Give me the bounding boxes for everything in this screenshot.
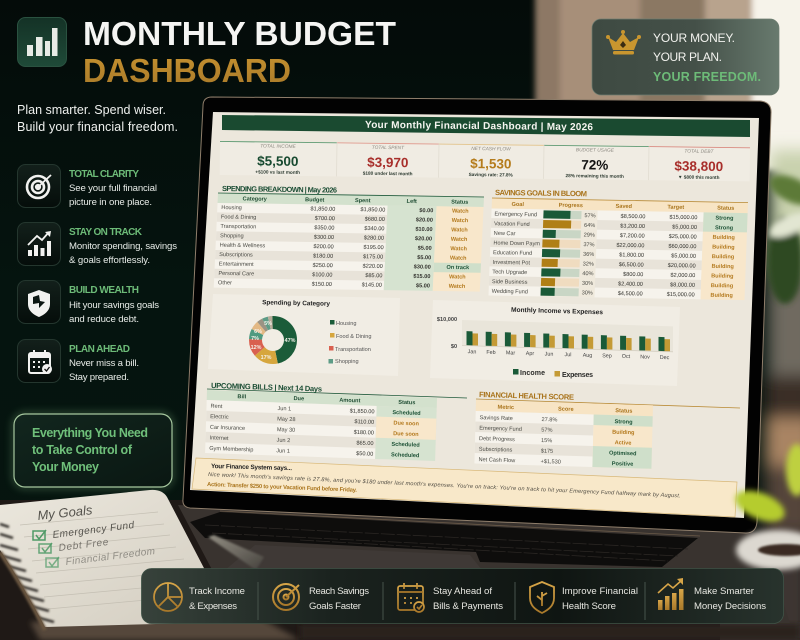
table: spending breakdown: $1,850.00 <box>360 207 385 214</box>
bar chart: Jan <box>468 349 476 355</box>
icon: growth chart <box>28 231 51 256</box>
bar chart: Nov <box>640 354 650 361</box>
panel: monthly income vs expenses: $10,000 <box>437 317 457 323</box>
table: financial health score: Score <box>558 406 574 413</box>
icon: pie chart <box>154 583 182 611</box>
table: spending breakdown: Watch <box>451 237 468 243</box>
KPI: total debt: ▼ $800 this month <box>678 174 720 180</box>
KPI: total spent: TOTAL SPENT <box>372 145 405 151</box>
table: upcoming bills: $110.00 <box>354 419 374 426</box>
callout: finance system message <box>192 458 737 517</box>
benefit: stay ahead <box>398 583 503 612</box>
benefit: stay ahead: Stay Ahead of <box>433 586 492 597</box>
financial health heading <box>476 390 740 408</box>
table: savings goals: 64% <box>584 223 595 229</box>
table: spending breakdown: Transportation <box>220 224 256 230</box>
callout: finance system message: Nice work! This month's savings rate is 27.8%, and you're $180 under last month's expenses. You're on track: You're on track to hit your Emergency Fund halfway mark by August. <box>208 472 681 499</box>
table: upcoming bills: Jun 1 <box>276 448 290 455</box>
table: spending breakdown: $10.00 <box>415 227 433 233</box>
table: savings goals: 30% <box>582 290 593 297</box>
table: savings goals: $3,200.00 <box>620 224 645 230</box>
table: financial health score: Debt Progress <box>479 436 515 443</box>
table: spending breakdown: $280.00 <box>364 235 384 242</box>
table: spending breakdown: $20.00 <box>416 217 433 224</box>
table: savings goals: $2,000.00 <box>670 273 695 279</box>
table: spending breakdown: Subscriptions <box>219 252 253 259</box>
table: savings goals: Wedding Fund <box>492 289 528 295</box>
icon: growth chart <box>658 589 684 610</box>
table: savings goals: Tech Upgrade <box>492 269 527 276</box>
KPI: net cash flow: Savings rate: 27.8% <box>469 172 514 178</box>
handwriting: my goals: Debt Free <box>58 537 109 554</box>
bar chart: Mar <box>506 350 515 357</box>
KPI: net cash flow: $1,530 <box>470 156 512 171</box>
table: spending breakdown: Watch <box>449 274 466 281</box>
table: spending breakdown: $200.00 <box>313 244 334 250</box>
handwriting: my goals: Emergency Fund <box>52 520 135 541</box>
table: savings goals: Saved <box>615 204 633 210</box>
feature: plan ahead <box>18 340 139 383</box>
table: spending breakdown: $300.00 <box>314 235 334 241</box>
table: financial health score: Metric <box>498 405 514 411</box>
callout: everything you need: to Take Control of <box>32 443 133 457</box>
title: MONTHLY BUDGET <box>83 16 397 53</box>
KPI: budget usage: 28% remaining this month <box>565 173 624 179</box>
table: spending breakdown: $1,850.00 <box>310 206 335 213</box>
callout: your money your plan <box>592 19 779 95</box>
icon: shield <box>28 290 50 317</box>
table: savings goals: 57% <box>584 213 596 219</box>
table: spending breakdown: $680.00 <box>365 217 385 223</box>
benefit: reach savings: Reach Savings <box>309 586 369 597</box>
table: upcoming bills: Scheduled <box>392 410 421 417</box>
callout: everything you need: Your Money <box>32 460 99 474</box>
callout: everything you need <box>14 414 172 487</box>
table: financial health score: Subscriptions <box>479 447 513 454</box>
table: upcoming bills: May 30 <box>277 427 295 434</box>
benefit: improve health: Health Score <box>562 601 616 612</box>
pen <box>208 535 264 570</box>
callout: finance system message: Your Finance System says... <box>211 463 292 472</box>
table: spending breakdown: $180.00 <box>313 253 333 260</box>
table: spending breakdown: Status <box>451 200 468 206</box>
feature: stay on track: STAY ON TRACK <box>69 227 143 238</box>
ruled lines <box>20 512 200 609</box>
feature: stay on track: & goals effortlessly. <box>69 255 150 266</box>
chart legend <box>328 320 371 365</box>
table: savings goals: $7,200.00 <box>620 233 645 240</box>
panel: monthly income vs expenses <box>430 300 680 386</box>
table: upcoming bills: Rent <box>210 404 223 410</box>
table: spending breakdown: Watch <box>449 284 466 290</box>
table: savings goals: $1,800.00 <box>619 252 644 259</box>
progress bars <box>541 210 582 296</box>
table: spending breakdown: Watch <box>450 246 468 252</box>
bar chart: Aug <box>583 353 592 359</box>
table: spending breakdown: Spent <box>355 198 371 204</box>
table: savings goals: 32% <box>583 261 594 268</box>
handwriting: my goals: Financial Freedom <box>65 546 156 568</box>
table: savings goals: Building <box>711 273 734 280</box>
table: financial health score: Building <box>612 430 635 436</box>
donut labels: 12% <box>251 345 262 351</box>
checkboxes <box>33 530 59 567</box>
table: savings goals <box>488 198 748 300</box>
table: savings goals: $4,500.00 <box>618 291 643 297</box>
icon: shield with plant <box>530 582 554 613</box>
benefits bar <box>142 568 784 624</box>
table: spending breakdown: $700.00 <box>315 216 335 222</box>
dashboard title bar <box>222 115 750 137</box>
notebook <box>0 490 232 630</box>
bar chart: Apr <box>526 351 534 357</box>
table: savings goals: Goal <box>511 202 525 208</box>
feature: total clarity: picture in one place. <box>69 197 152 208</box>
table: financial health score: Emergency Fund <box>479 426 522 433</box>
table: savings goals: $5,000.00 <box>672 224 697 231</box>
feature: total clarity <box>18 164 157 208</box>
dashboard title bar: Your Monthly Financial Dashboard | May 2026 <box>365 120 594 133</box>
callout: your money your plan: YOUR MONEY. <box>653 31 735 45</box>
table: upcoming bills: Due soon <box>393 431 419 438</box>
financial health heading: FINANCIAL HEALTH SCORE <box>479 390 574 402</box>
table: savings goals: Investment Pot <box>493 260 531 267</box>
table: upcoming bills: Scheduled <box>391 452 420 459</box>
donut labels: 7% <box>251 336 259 342</box>
benefit: reach savings <box>273 584 369 612</box>
table: spending breakdown: $350.00 <box>314 225 335 232</box>
table: savings goals: $8,000.00 <box>670 282 695 289</box>
table: financial health score: +$1,530 <box>540 459 561 466</box>
savings goals heading: SAVINGS GOALS IN BLOOM <box>495 188 587 198</box>
table: savings goals: Education Fund <box>493 250 532 257</box>
KPI: total spent <box>363 145 413 176</box>
donut labels: 6% <box>254 329 262 335</box>
handwriting: my goals <box>37 502 156 568</box>
bar chart <box>462 320 673 361</box>
table: spending breakdown: $100.00 <box>312 272 332 279</box>
table: upcoming bills: May 28 <box>277 416 296 423</box>
table: savings goals: Side Business <box>492 279 528 286</box>
chart legend: Transportation <box>335 347 371 353</box>
bar chart: Jun <box>545 351 553 358</box>
table: upcoming bills: Electric <box>210 414 229 421</box>
table: financial health score <box>474 400 653 469</box>
benefit: smarter decisions <box>658 578 766 612</box>
chart legend <box>513 369 593 379</box>
table: savings goals: Strong <box>715 216 734 222</box>
bar chart: Jul <box>565 352 571 358</box>
icon: target <box>273 584 299 610</box>
table: upcoming bills <box>205 390 437 461</box>
table: spending breakdown: $5.00 <box>416 283 430 289</box>
KPI: total income: TOTAL INCOME <box>260 143 297 150</box>
chart legend: Expenses <box>562 372 593 379</box>
panel: monthly income vs expenses: $0 <box>451 344 457 350</box>
table: savings goals: $800.00 <box>623 272 643 278</box>
icon: calendar <box>398 583 424 612</box>
bar chart: Oct <box>622 354 631 360</box>
table: spending breakdown: $195.00 <box>363 245 384 251</box>
table: savings goals: Home Down Paym <box>493 241 540 247</box>
table: savings goals: $20,000.00 <box>668 263 696 270</box>
table: spending breakdown: Watch <box>451 227 468 234</box>
panel: spending by category <box>208 294 400 376</box>
feature: total clarity: See your full financial <box>69 183 157 194</box>
table: financial health score: 15% <box>541 438 552 444</box>
handwriting: my goals: My Goals <box>37 502 94 523</box>
screen <box>190 112 759 518</box>
table: spending breakdown: $30.00 <box>414 264 431 271</box>
benefit: track income: & Expenses <box>189 601 237 612</box>
callout: finance system message: Action: Transfer $250 to your Vacation Fund before Friday. <box>207 482 357 494</box>
KPI: budget usage <box>565 147 624 179</box>
table: savings goals: Emergency Fund <box>494 212 537 218</box>
table: upcoming bills: Scheduled <box>391 442 420 449</box>
KPI cards <box>220 141 750 181</box>
benefit: stay ahead: Bills & Payments <box>433 601 503 612</box>
table: upcoming bills: Car Insurance <box>210 425 245 432</box>
table: spending breakdown: $85.00 <box>365 273 382 279</box>
table: savings goals: Building <box>712 235 736 241</box>
feature: build wealth: and reduce debt. <box>69 314 139 325</box>
table: upcoming bills: Jun 1 <box>277 406 291 412</box>
feature: stay on track <box>18 222 177 266</box>
table: savings goals: 30% <box>582 281 593 287</box>
KPI: total debt: TOTAL DEBT <box>684 149 715 155</box>
panel: spending by category: Spending by Category <box>262 299 330 308</box>
table: savings goals: 29% <box>584 232 595 239</box>
upcoming bills heading <box>207 381 467 398</box>
KPI: total income <box>255 143 300 175</box>
table: spending breakdown: $5.00 <box>418 246 432 252</box>
callout: everything you need: Everything You Need <box>32 426 148 440</box>
logo icon <box>18 18 66 66</box>
KPI: total spent: $3,970 <box>367 155 409 170</box>
table: financial health score: 27.8% <box>541 417 558 423</box>
KPI: total spent: $180 under last month <box>363 171 413 176</box>
table: savings goals: Status <box>717 206 734 212</box>
KPI: total debt <box>674 148 723 180</box>
table: savings goals: $2,400.00 <box>618 281 643 288</box>
table: spending breakdown: $20.00 <box>415 236 432 242</box>
table: savings goals: $60,000.00 <box>668 244 696 250</box>
table: spending breakdown: Entertainment <box>219 261 254 268</box>
benefit: reach savings: Goals Faster <box>309 601 362 612</box>
table: spending breakdown: Budget <box>305 197 325 204</box>
table: financial health score: 57% <box>541 427 553 434</box>
table: savings goals: Building <box>711 283 734 290</box>
table: savings goals: $5,000.00 <box>671 253 696 260</box>
table: spending breakdown: On track <box>446 265 470 271</box>
benefit: improve health <box>530 582 638 613</box>
table: spending breakdown: Watch <box>452 209 469 215</box>
table: spending breakdown: Personal Care <box>218 271 254 277</box>
tagline <box>17 103 178 134</box>
table: financial health score: Status <box>615 408 632 415</box>
icon: target <box>27 175 51 198</box>
table: upcoming bills: Internet <box>209 435 229 442</box>
table: upcoming bills: Bill <box>237 394 247 400</box>
table: upcoming bills: Status <box>398 400 415 406</box>
callout: your money your plan: YOUR FREEDOM. <box>653 70 761 84</box>
donut labels: 47% <box>285 338 296 344</box>
table: spending breakdown: $0.00 <box>419 208 433 214</box>
table: spending breakdown: $175.00 <box>363 254 383 261</box>
table: savings goals: $15,000.00 <box>667 292 695 298</box>
feature: plan ahead: PLAN AHEAD <box>69 344 130 355</box>
table: spending breakdown: $145.00 <box>362 282 382 289</box>
table: upcoming bills: Due <box>293 396 304 402</box>
callout: your money your plan: YOUR PLAN. <box>653 50 722 64</box>
table: financial health score: Savings Rate <box>479 415 513 422</box>
table: upcoming bills: Amount <box>339 398 361 404</box>
table: savings goals: $22,000.00 <box>616 243 644 249</box>
KPI: net cash flow <box>469 146 514 178</box>
chart legend: Income <box>520 370 545 377</box>
feature: plan ahead: Stay prepared. <box>69 372 129 383</box>
panel: monthly income vs expenses: Monthly Income vs Expenses <box>511 307 603 316</box>
table: financial health score: Optimised <box>609 451 637 457</box>
icon: crown <box>608 33 639 50</box>
table: savings goals: New Car <box>494 231 516 237</box>
benefit: smarter decisions: Make Smarter <box>694 586 755 597</box>
table: financial health score: Net Cash Flow <box>478 457 516 464</box>
table: spending breakdown: Left <box>406 199 417 205</box>
table: savings goals: Building <box>712 254 735 261</box>
table: spending breakdown: Other <box>218 280 232 286</box>
table: upcoming bills: Gym Membership <box>209 446 253 453</box>
donut labels <box>251 321 296 361</box>
plant and coffee cup <box>731 444 800 570</box>
notebook spiral binding <box>0 524 54 622</box>
table: savings goals: Vacation Fund <box>494 221 530 228</box>
table: upcoming bills: $50.00 <box>356 451 373 458</box>
feature: build wealth: Hit your savings goals <box>69 300 159 311</box>
feature: stay on track: Monitor spending, savings <box>69 241 177 252</box>
KPI: total income: +$100 vs last month <box>255 169 300 175</box>
KPI: budget usage: BUDGET USAGE <box>576 147 615 154</box>
table: spending breakdown: Watch <box>451 218 469 224</box>
table: financial health score: Strong <box>614 419 633 426</box>
table: financial health score: Positive <box>612 461 633 468</box>
bar chart: Feb <box>486 350 496 356</box>
icon: calendar <box>29 350 52 374</box>
table: spending breakdown: $15.00 <box>413 274 430 280</box>
title <box>83 16 397 89</box>
table: spending breakdown: $220.00 <box>362 264 383 270</box>
table: upcoming bills: $1,850.00 <box>350 409 375 415</box>
benefit: track income <box>154 583 245 612</box>
table: upcoming bills: $65.00 <box>356 440 374 447</box>
table: spending breakdown: Housing <box>221 205 242 211</box>
table: spending breakdown: Health & Wellness <box>219 243 266 249</box>
table: savings goals: 40% <box>582 271 594 277</box>
table: savings goals: Strong <box>715 225 734 232</box>
bar chart: Sep <box>602 353 612 359</box>
table: spending breakdown: Food & Dining <box>221 214 256 221</box>
table: savings goals: $8,500.00 <box>620 214 646 220</box>
table: savings goals: 36% <box>583 252 594 258</box>
KPI: total debt: $38,800 <box>674 158 723 174</box>
table: financial health score: $175 <box>541 448 553 455</box>
donut labels: 17% <box>261 355 272 361</box>
table: savings goals: Building <box>710 293 733 299</box>
table: savings goals: Building <box>711 264 735 270</box>
donut labels: 5% <box>264 321 272 327</box>
laptop keyboard deck <box>178 505 790 623</box>
chart legend: Housing <box>336 321 357 327</box>
spending breakdown heading: SPENDING BREAKDOWN | May 2026 <box>222 184 337 195</box>
table: upcoming bills: $180.00 <box>354 430 374 436</box>
table: spending breakdown: $5.00 <box>417 255 431 261</box>
KPI: total income: $5,500 <box>257 153 299 169</box>
table: upcoming bills: Jun 2 <box>276 438 290 444</box>
table: financial health score: Active <box>615 440 631 447</box>
tagline: Build your financial freedom. <box>17 120 178 134</box>
table: spending breakdown: $340.00 <box>364 226 385 232</box>
table: savings goals: 37% <box>583 242 595 248</box>
table: savings goals: $6,500.00 <box>619 262 644 269</box>
table: savings goals: Progress <box>559 203 583 209</box>
table: spending breakdown: Shopping <box>220 233 244 240</box>
donut chart <box>256 322 290 358</box>
feature: plan ahead: Never miss a bill. <box>69 358 139 369</box>
table: savings goals: Target <box>667 205 684 211</box>
feature: total clarity: TOTAL CLARITY <box>69 169 139 180</box>
table: savings goals: Building <box>712 244 735 251</box>
upcoming bills heading: UPCOMING BILLS | Next 14 Days <box>211 381 322 393</box>
table: spending breakdown: Category <box>242 196 268 203</box>
benefit: improve health: Improve Financial <box>562 586 638 597</box>
title: DASHBOARD <box>83 52 291 89</box>
table: spending breakdown: Watch <box>450 256 467 262</box>
feature: build wealth: BUILD WEALTH <box>69 285 139 296</box>
table: savings goals: $25,000.00 <box>669 234 697 241</box>
benefit: track income: Track Income <box>189 586 245 597</box>
tagline: Plan smarter. Spend wiser. <box>17 103 166 117</box>
table: spending breakdown: $250.00 <box>312 263 333 269</box>
bar chart: Dec <box>660 355 670 361</box>
benefit: smarter decisions: Money Decisions <box>694 601 766 612</box>
KPI: net cash flow: NET CASH FLOW <box>471 146 511 152</box>
KPI: budget usage: 72% <box>581 157 608 173</box>
feature: build wealth <box>18 280 159 325</box>
table: savings goals: $15,000.00 <box>669 215 698 221</box>
table: spending breakdown <box>214 193 484 292</box>
table: spending breakdown: $150.00 <box>312 282 332 288</box>
chart legend: Shopping <box>335 359 359 365</box>
laptop bezel <box>183 97 771 533</box>
table: upcoming bills: Due soon <box>393 421 420 427</box>
chart legend: Food & Dining <box>336 334 371 340</box>
